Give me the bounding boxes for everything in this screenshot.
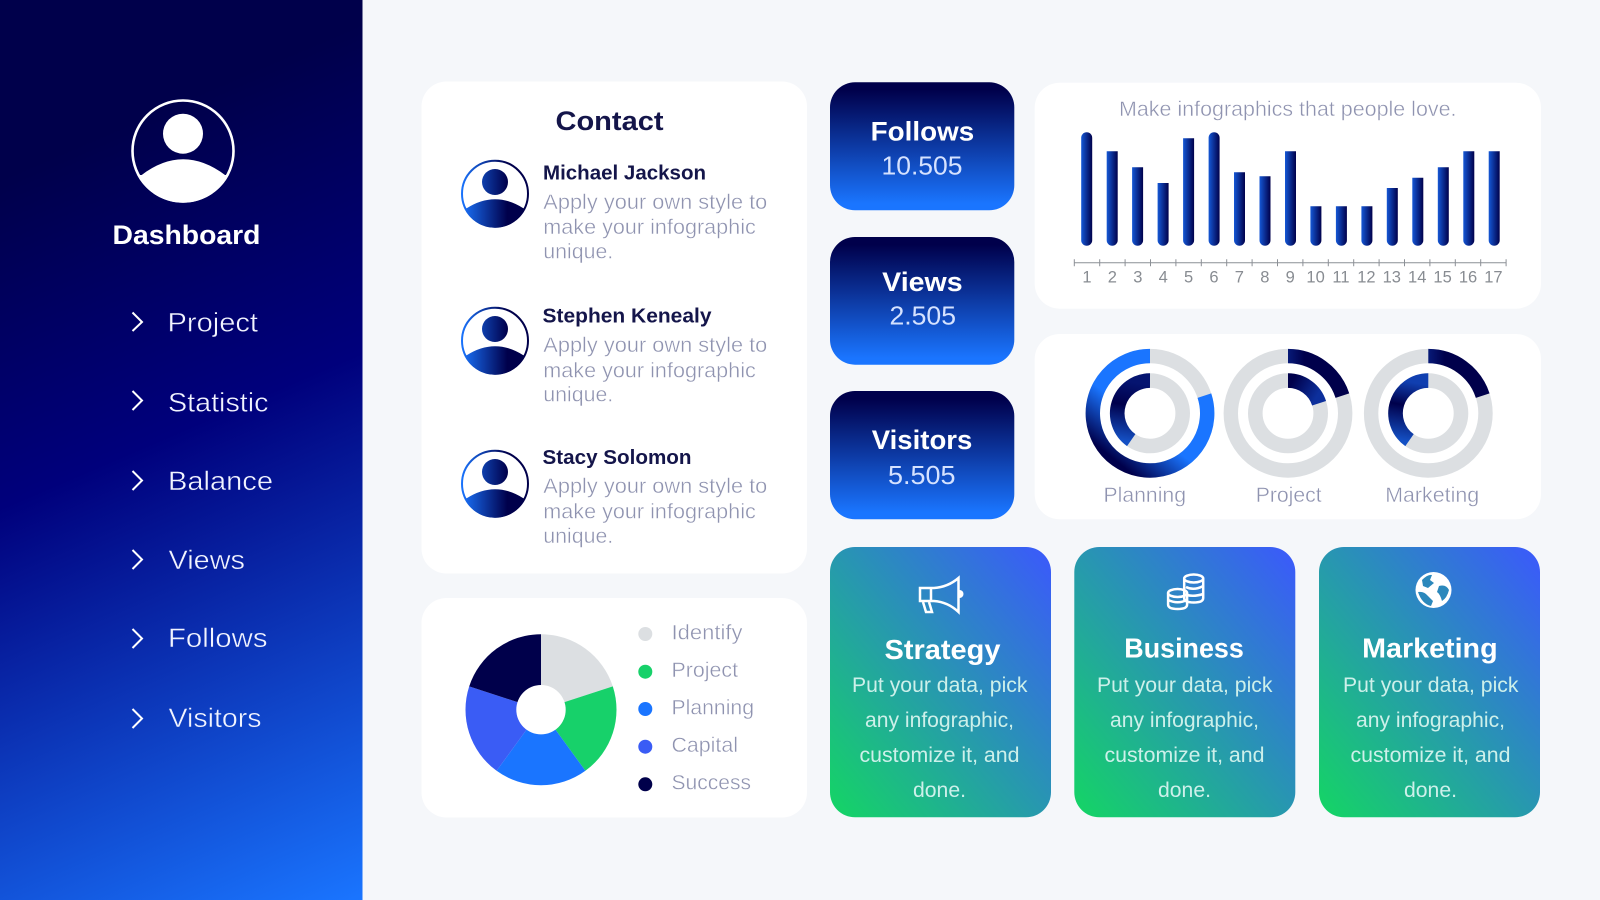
x axis: 17 — [1484, 268, 1503, 286]
donut: Project: Project — [1256, 483, 1322, 507]
legend: Project — [672, 659, 738, 682]
menu item: Project: Project — [168, 308, 259, 338]
sidebar title: Dashboard — [112, 220, 260, 250]
legend: Identify — [672, 621, 743, 644]
menu item: Balance: Balance — [168, 466, 273, 496]
x axis: 5 — [1184, 268, 1193, 286]
chart title: Make infographics that people love. — [1119, 98, 1456, 121]
stat card: Views — [830, 237, 1014, 365]
x axis: 13 — [1383, 268, 1401, 286]
card: Strategy: Put your data, pick — [852, 674, 1028, 697]
menu item: Follows: Follows — [168, 623, 268, 653]
donut: Project — [1231, 356, 1345, 507]
menu item: Visitors: Visitors — [168, 703, 262, 733]
card: Marketing: customize it, and — [1350, 744, 1510, 767]
stat card: Visitors: 5.505 — [888, 460, 956, 490]
card: Marketing: done. — [1404, 779, 1457, 802]
icon: megaphone — [920, 578, 964, 612]
stat card: Views: Views — [882, 267, 963, 297]
x axis: 15 — [1433, 268, 1452, 286]
panel: donut charts — [1035, 334, 1541, 519]
icon: coins — [1168, 574, 1203, 609]
stat card: Follows: 10.505 — [882, 151, 962, 181]
stat card: Follows: Follows — [871, 116, 974, 146]
panel: sidebar — [0, 0, 362, 900]
menu item: Views — [132, 545, 245, 575]
contact: Michael Jackson: unique. — [543, 240, 613, 263]
x axis: 4 — [1159, 268, 1168, 286]
contact: Stephen Kenealy: Apply your own style to — [543, 334, 767, 357]
contact: Michael Jackson — [462, 161, 767, 263]
card: Strategy — [830, 547, 1051, 817]
card: Marketing: Marketing — [1362, 633, 1498, 664]
card: Business: Business — [1124, 633, 1244, 664]
x axis — [1074, 259, 1506, 286]
card: Business: any infographic, — [1110, 709, 1259, 732]
contact: Stephen Kenealy: unique. — [543, 384, 613, 407]
card: Business — [1074, 547, 1295, 817]
card: Strategy: customize it, and — [860, 744, 1020, 767]
contact: Stephen Kenealy: Stephen Kenealy — [542, 306, 712, 328]
x axis: 6 — [1209, 268, 1219, 286]
x axis: 1 — [1082, 268, 1092, 286]
x axis: 16 — [1459, 268, 1477, 286]
contact: Stacy Solomon: Stacy Solomon — [542, 447, 692, 469]
contact: Stephen Kenealy — [462, 306, 767, 407]
card: Marketing: Put your data, pick — [1343, 674, 1519, 697]
x axis: 12 — [1357, 268, 1376, 286]
panel: pie chart — [422, 598, 807, 818]
panel: bar chart — [1035, 83, 1541, 309]
donut: Planning: Planning — [1104, 483, 1186, 507]
pie chart — [466, 634, 616, 785]
card: Marketing: any infographic, — [1356, 709, 1505, 732]
card: Business: customize it, and — [1104, 744, 1264, 767]
menu item: Balance — [132, 466, 273, 496]
card: Strategy: any infographic, — [865, 709, 1014, 732]
menu item: Follows — [132, 623, 268, 653]
stat card: Views: 2.505 — [890, 300, 956, 330]
stat card: Visitors — [830, 391, 1014, 519]
card: Strategy: done. — [913, 779, 966, 802]
card: Business: done. — [1158, 779, 1211, 802]
donut: Marketing — [1371, 356, 1486, 507]
card: Business: Put your data, pick — [1097, 674, 1273, 697]
contact: Stacy Solomon: make your infographic — [543, 500, 756, 523]
menu item: Statistic — [132, 388, 268, 418]
menu item: Visitors — [132, 703, 262, 733]
contact: Michael Jackson: Apply your own style to — [543, 191, 767, 214]
contact: Stephen Kenealy: make your infographic — [543, 359, 756, 382]
contact heading: Contact — [556, 106, 664, 136]
donut: Planning — [1093, 356, 1207, 507]
menu item: Statistic: Statistic — [168, 388, 268, 418]
contact: Michael Jackson: make your infographic — [543, 216, 756, 239]
x axis: 2 — [1108, 268, 1117, 286]
contact: Stacy Solomon: Apply your own style to — [543, 475, 767, 498]
card: Strategy: Strategy — [884, 634, 1001, 665]
menu item: Views: Views — [168, 545, 245, 575]
stat card: Visitors: Visitors — [872, 425, 972, 455]
legend: Capital — [672, 734, 738, 757]
x axis: 11 — [1332, 268, 1350, 286]
stat card: Follows — [830, 82, 1014, 210]
x axis: 8 — [1260, 268, 1269, 286]
contact: Michael Jackson: Michael Jackson — [543, 162, 706, 184]
bar chart — [1081, 132, 1500, 246]
icon: globe — [1416, 572, 1452, 608]
icon: dashboard user avatar — [132, 100, 234, 203]
x axis: 3 — [1133, 268, 1142, 286]
legend: Success — [672, 772, 751, 795]
legend — [638, 621, 754, 795]
card: Marketing — [1319, 547, 1540, 817]
contact: Stacy Solomon: unique. — [543, 525, 613, 548]
x axis: 14 — [1408, 268, 1426, 286]
x axis: 7 — [1235, 268, 1244, 286]
menu item: Project — [132, 308, 259, 338]
legend: Planning — [672, 696, 754, 719]
contact: Stacy Solomon — [462, 447, 767, 548]
x axis: 9 — [1286, 268, 1295, 286]
panel: contact — [422, 82, 807, 574]
x axis: 10 — [1306, 268, 1325, 286]
donut: Marketing: Marketing — [1385, 483, 1479, 507]
